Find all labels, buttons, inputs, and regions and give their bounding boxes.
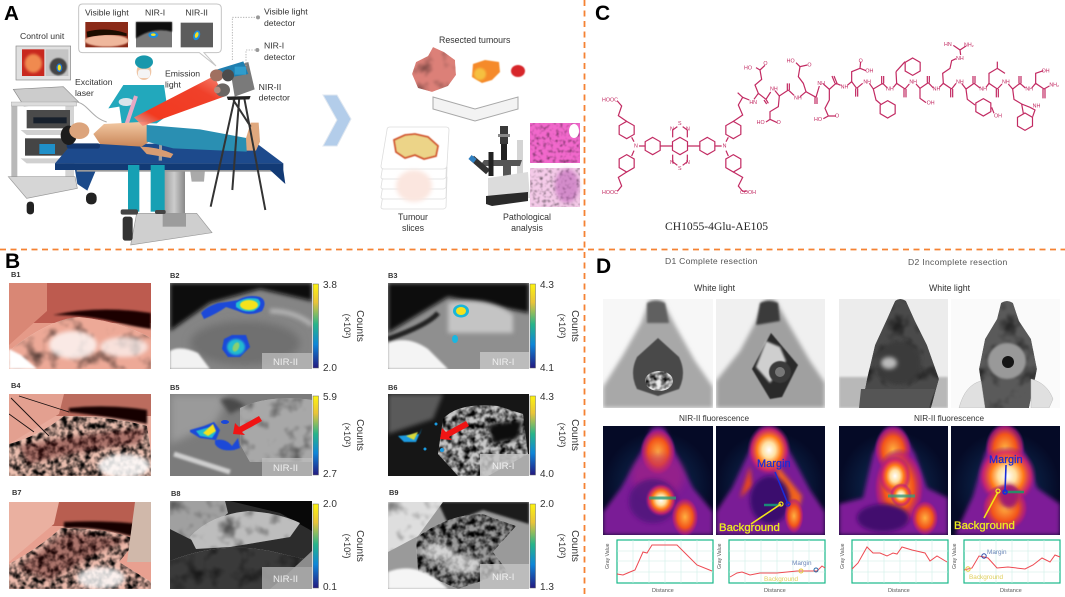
chemical structure CH1055-4Glu-AE105: NH <box>841 84 849 90</box>
chemical structure CH1055-4Glu-AE105: NH₂ <box>1049 83 1059 89</box>
image B6 with red arrow and colour bar: 4.3 <box>540 392 554 403</box>
line chart D1 left: Distance <box>652 588 674 594</box>
NIR camera on tripod <box>210 61 265 210</box>
image B8 with colour bar: (×10²) <box>342 534 352 558</box>
chemical structure CH1055-4Glu-AE105: OH <box>927 101 935 107</box>
panel letter C: C <box>595 2 610 25</box>
line chart D1 left: Gray Value <box>605 543 611 569</box>
chemical structure CH1055-4Glu-AE105: N <box>723 143 727 149</box>
panel letter B: B <box>5 250 20 273</box>
chemical structure CH1055-4Glu-AE105: OH <box>1042 69 1050 75</box>
label: NIR-I detector: detector <box>264 52 295 62</box>
operating table <box>55 138 285 245</box>
line chart D2 left: Distance <box>888 588 910 594</box>
label: visible light detector: Visible light <box>264 7 308 17</box>
image B3 with colour bar <box>388 271 580 374</box>
image B4 <box>9 381 151 478</box>
chemical structure CH1055-4Glu-AE105: HO <box>757 120 765 126</box>
chemical structure CH1055-4Glu-AE105: N <box>670 127 674 133</box>
D2 NIR fluorescence image right with margin and background labels: Background <box>954 520 1015 532</box>
label: resected tumours: Resected tumours <box>439 35 511 45</box>
D1 NIR fluorescence image right with margin and background labels <box>716 424 825 535</box>
chemical structure CH1055-4Glu-AE105: O <box>777 120 781 126</box>
image B3 with colour bar: NIR-I <box>492 357 514 368</box>
inset callout: visible, NIR-I and NIR-II views: NIR-I <box>145 8 165 18</box>
image B9 with colour bar: B9 <box>389 488 398 497</box>
image B2 with colour bar <box>170 271 365 374</box>
image B6 with red arrow and colour bar: B6 <box>388 383 397 392</box>
surgeon <box>108 55 168 215</box>
image B3 with colour bar: (×10²) <box>557 314 567 338</box>
chemical structure CH1055-4Glu-AE105: HOOC <box>602 98 618 104</box>
chemical structure CH1055-4Glu-AE105: HN <box>749 100 757 106</box>
chemical structure CH1055-4Glu-AE105 <box>602 42 1059 196</box>
image B5 with red arrow and colour bar: Counts <box>354 419 365 451</box>
label: emission light: light <box>165 80 181 90</box>
D1 NIR fluorescence image left <box>603 426 713 535</box>
line chart D1 right: Margin <box>792 560 812 567</box>
chemical structure CH1055-4Glu-AE105: NH <box>909 79 917 85</box>
image B2 with colour bar: 3.8 <box>323 280 337 291</box>
image B6 with red arrow and colour bar: (×10²) <box>557 423 567 447</box>
image B9 with colour bar <box>388 488 580 593</box>
panel letter D: D <box>596 255 611 278</box>
chemical structure CH1055-4Glu-AE105: NH <box>886 87 894 93</box>
chemical structure CH1055-4Glu-AE105: HN <box>944 42 952 48</box>
label: pathological analysis: Pathological <box>503 212 551 222</box>
line chart D2 left <box>840 540 948 594</box>
image B5 with red arrow and colour bar <box>170 383 365 480</box>
chemical structure CH1055-4Glu-AE105: OH <box>994 114 1002 120</box>
chemical structure CH1055-4Glu-AE105: N <box>686 160 690 166</box>
chemical structure CH1055-4Glu-AE105: N <box>670 160 674 166</box>
chemical structure CH1055-4Glu-AE105: NH <box>770 87 778 93</box>
sub-headings white light: White light <box>929 283 971 293</box>
chemical structure CH1055-4Glu-AE105: S <box>678 166 682 172</box>
image B3 with colour bar: B3 <box>388 271 397 280</box>
microscope <box>470 126 530 206</box>
chemical structure CH1055-4Glu-AE105: NH <box>979 87 987 93</box>
detector leader dots <box>255 15 260 52</box>
chemical structure CH1055-4Glu-AE105: O <box>835 114 839 120</box>
image B9 with colour bar: (×10²) <box>557 534 567 558</box>
D2 white light image left <box>839 299 948 408</box>
image B3 with colour bar: 4.3 <box>540 280 554 291</box>
D1 white light image right <box>716 299 825 408</box>
line chart D2 right: Distance <box>1000 588 1022 594</box>
chemical structure CH1055-4Glu-AE105: NH₂ <box>964 43 974 49</box>
chemical structure CH1055-4Glu-AE105: NH <box>817 81 825 87</box>
image B9 with colour bar: 1.3 <box>540 582 554 593</box>
label: excitation laser: Excitation <box>75 77 113 87</box>
image B8 with colour bar: Counts <box>354 530 365 562</box>
line chart D1 right: Gray Value <box>717 543 723 569</box>
image B5 with red arrow and colour bar: 5.9 <box>323 392 337 403</box>
image B2 with colour bar: B2 <box>170 271 179 280</box>
label: excitation laser: laser <box>75 88 94 98</box>
image B8 with colour bar: B8 <box>171 489 180 498</box>
panel A: surgical navigation system <box>4 2 308 245</box>
chemical structure CH1055-4Glu-AE105: O <box>763 61 767 67</box>
resected tumour samples <box>412 47 525 92</box>
histology images <box>530 123 580 207</box>
line chart D2 right: Gray Value <box>952 543 958 569</box>
image B4: B4 <box>11 381 21 390</box>
chemical structure CH1055-4Glu-AE105: HO <box>744 65 752 71</box>
image B2 with colour bar: NIR-II <box>273 357 298 368</box>
chemical structure CH1055-4Glu-AE105: HO <box>787 59 795 65</box>
image B7 <box>9 488 151 589</box>
image B9 with colour bar: NIR-I <box>492 572 514 583</box>
chemical structure CH1055-4Glu-AE105: NH <box>956 56 964 62</box>
control unit cart and monitor <box>8 46 107 214</box>
chemical structure CH1055-4Glu-AE105: N <box>686 127 690 133</box>
image B1 <box>9 270 151 369</box>
line chart D2 right <box>952 540 1060 594</box>
line chart D1 right <box>717 540 825 594</box>
line chart D2 left: Gray Value <box>840 543 846 569</box>
image B2 with colour bar: 2.0 <box>323 363 337 374</box>
sub-headings NIR-II fluorescence: NIR-II fluorescence <box>679 414 750 423</box>
compound name: CH1055-4Glu-AE105 <box>665 220 768 233</box>
arrow: blue chevron <box>323 95 351 146</box>
chemical structure CH1055-4Glu-AE105: NH <box>933 87 941 93</box>
patient lying on table <box>61 122 260 158</box>
heading D1: D1 Complete resection <box>665 256 758 266</box>
label: tumour slices: slices <box>402 223 425 233</box>
image B6 with red arrow and colour bar: 4.0 <box>540 469 554 480</box>
heading D2: D2 Incomplete resection <box>908 257 1008 267</box>
chemical structure CH1055-4Glu-AE105: HO <box>814 117 822 123</box>
panel D: mouse resection models <box>596 255 1060 594</box>
D2 NIR fluorescence image right with margin and background labels <box>951 423 1060 535</box>
image B8 with colour bar: NIR-II <box>273 574 298 585</box>
image B2 with colour bar: (×10²) <box>342 314 352 338</box>
sub-headings white light <box>694 283 971 293</box>
chemical structure CH1055-4Glu-AE105: NH <box>1025 87 1033 93</box>
chemical structure CH1055-4Glu-AE105: N <box>634 143 638 149</box>
image B7: B7 <box>12 488 21 497</box>
image B5 with red arrow and colour bar: B5 <box>170 383 179 392</box>
chemical structure CH1055-4Glu-AE105: NH <box>1033 103 1041 109</box>
D2 NIR fluorescence image left <box>839 426 948 535</box>
D2 white light image right <box>958 301 1054 408</box>
stacked tumour slices <box>381 127 449 209</box>
label: NIR-I detector: NIR-I <box>264 41 284 51</box>
image B9 with colour bar: Counts <box>569 530 580 562</box>
label: NIR-II detector: NIR-II <box>259 82 281 92</box>
image B8 with colour bar: 0.1 <box>323 582 337 593</box>
label: pathological analysis: analysis <box>511 223 543 233</box>
line chart D2 right: Background <box>969 574 1004 581</box>
panel C: molecular structure <box>595 2 1059 233</box>
emission light beam <box>134 76 224 126</box>
label: tumour slices: Tumour <box>398 212 428 222</box>
sub-headings NIR-II fluorescence <box>679 414 985 423</box>
D2 NIR fluorescence image right with margin and background labels: Margin <box>989 454 1023 466</box>
image B6 with red arrow and colour bar: NIR-I <box>492 461 514 472</box>
panel A right: resected tumours workflow <box>381 35 580 233</box>
chemical structure CH1055-4Glu-AE105: NH <box>863 79 871 85</box>
line chart D1 right: Distance <box>764 588 786 594</box>
image B5 with red arrow and colour bar: 2.7 <box>323 469 337 480</box>
chemical structure CH1055-4Glu-AE105: NH <box>794 95 802 101</box>
panel B: intraoperative images <box>5 250 580 593</box>
image B1: B1 <box>11 270 20 279</box>
image B8 with colour bar: 2.0 <box>323 499 337 510</box>
image B6 with red arrow and colour bar <box>388 383 580 480</box>
chemical structure CH1055-4Glu-AE105: HOOC <box>602 190 618 196</box>
D1 NIR fluorescence image right with margin and background labels: Background <box>719 522 780 534</box>
image B3 with colour bar: Counts <box>569 310 580 342</box>
label: NIR-II detector: detector <box>259 93 290 103</box>
image B3 with colour bar: 4.1 <box>540 363 554 374</box>
grey down chevron <box>433 97 518 121</box>
label: emission light: Emission <box>165 69 200 79</box>
label: visible light detector: detector <box>264 18 295 28</box>
inset callout: visible, NIR-I and NIR-II views <box>79 4 221 66</box>
chemical structure CH1055-4Glu-AE105: S <box>678 121 682 127</box>
image B9 with colour bar: 2.0 <box>540 499 554 510</box>
label: control unit: Control unit <box>20 31 65 41</box>
D1 white light image left <box>603 299 713 408</box>
detector leader lines <box>232 17 257 66</box>
chemical structure CH1055-4Glu-AE105: NH <box>956 79 964 85</box>
chemical structure CH1055-4Glu-AE105: NH <box>1002 79 1010 85</box>
image B5 with red arrow and colour bar: (×10²) <box>342 423 352 447</box>
sub-headings NIR-II fluorescence: NIR-II fluorescence <box>914 414 985 423</box>
chemical structure CH1055-4Glu-AE105: OH <box>865 68 873 74</box>
inset callout: visible, NIR-I and NIR-II views: Visible light <box>85 8 129 18</box>
chemical structure CH1055-4Glu-AE105: O <box>807 63 811 69</box>
panel letter A: A <box>4 2 19 25</box>
chemical structure CH1055-4Glu-AE105: O <box>859 58 863 64</box>
image B6 with red arrow and colour bar: Counts <box>569 419 580 451</box>
line chart D1 right: Background <box>764 576 799 583</box>
inset callout: visible, NIR-I and NIR-II views: NIR-II <box>185 8 208 18</box>
sub-headings white light: White light <box>694 283 736 293</box>
line chart D1 left <box>605 540 713 594</box>
line chart D2 right: Margin <box>987 549 1007 556</box>
image B5 with red arrow and colour bar: NIR-II <box>273 463 298 474</box>
image B2 with colour bar: Counts <box>354 310 365 342</box>
D1 NIR fluorescence image right with margin and background labels: Margin <box>757 458 791 470</box>
image B8 with colour bar <box>170 489 365 593</box>
chemical structure CH1055-4Glu-AE105: COOH <box>740 190 756 196</box>
